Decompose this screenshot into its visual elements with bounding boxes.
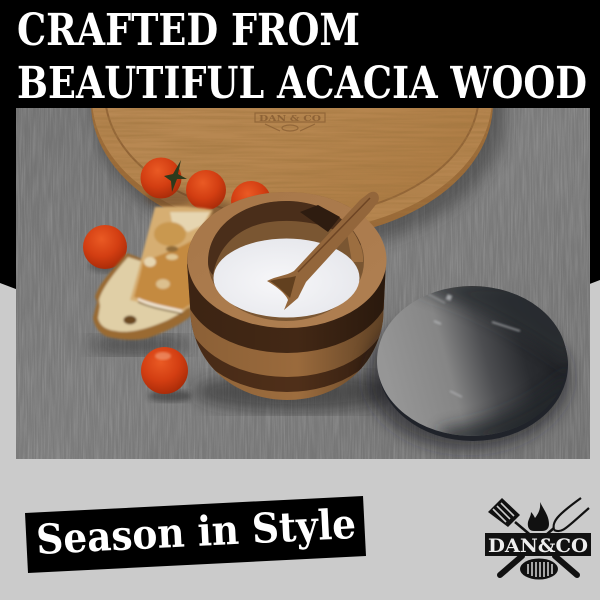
title: CRAFTED FROM bbox=[17, 5, 360, 56]
logo icon: spatula bbox=[488, 498, 578, 575]
marble lid bbox=[366, 280, 575, 450]
logo name bar: DAN&CO bbox=[488, 535, 588, 557]
title bbox=[17, 5, 587, 109]
acacia wood bowl bbox=[183, 190, 400, 412]
tomato front bbox=[141, 347, 192, 402]
tomatoes behind the bowl bbox=[140, 158, 271, 221]
logo icon: flame bbox=[528, 502, 549, 531]
slogan banner: Season in Style bbox=[35, 500, 357, 564]
bread slices bbox=[88, 207, 213, 355]
wooden plate with engraved logo bbox=[89, 108, 511, 246]
salt bbox=[214, 238, 360, 318]
logo icon: fork bbox=[500, 498, 589, 575]
photo: salt cellar on grey wood table bbox=[16, 108, 590, 459]
wooden spoon bbox=[267, 192, 379, 310]
logo: Dan & Co bbox=[485, 498, 591, 580]
wooden plate with engraved logo: DAN & CO bbox=[259, 114, 322, 124]
tomato left bbox=[83, 225, 127, 274]
logo icon: grill bbox=[520, 558, 558, 580]
